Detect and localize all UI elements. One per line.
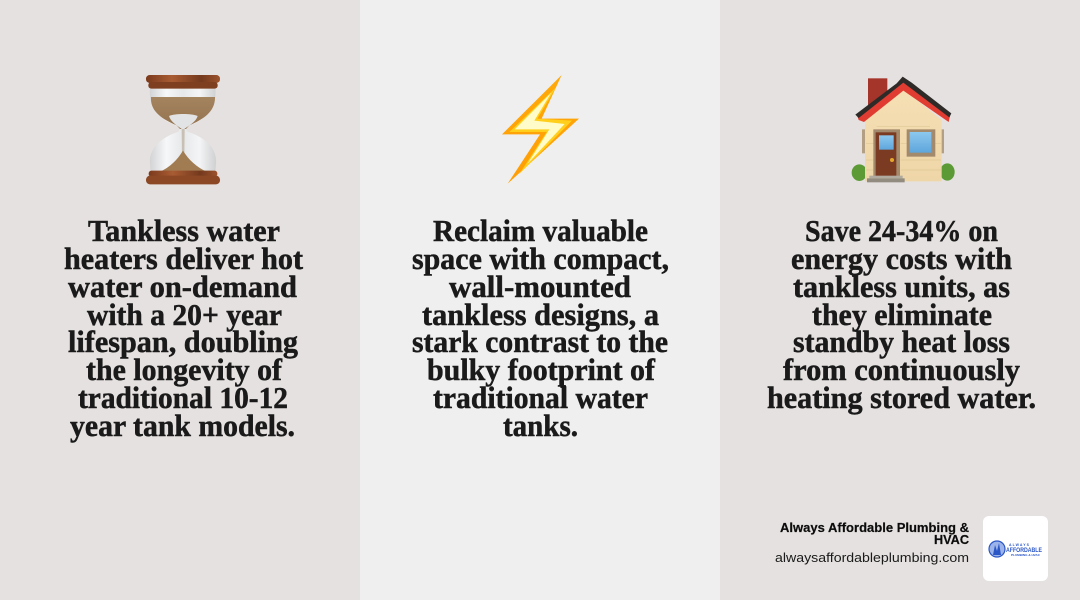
company name — [780, 520, 970, 547]
heading text: lifespan: heaters deliver hot — [64, 241, 304, 276]
company logo — [983, 516, 1048, 581]
panel: compact space — [360, 0, 720, 600]
heading text: compact space: space with compact, — [412, 241, 669, 276]
panel background: compact space — [360, 0, 720, 600]
panel background: energy savings — [720, 0, 1080, 600]
heading text: energy savings: standby heat loss — [793, 324, 1010, 359]
heading text: lifespan: lifespan, doubling — [68, 324, 298, 359]
heading text: lifespan: year tank models. — [70, 408, 295, 443]
panel: lifespan — [0, 0, 360, 600]
heading text: compact space: stark contrast to the — [412, 324, 668, 359]
website: alwaysaffordableplumbing.com — [775, 550, 969, 565]
icon: lightning bolt — [502, 75, 579, 184]
heading text: lifespan: the longevity of — [86, 352, 283, 387]
heading text: energy savings: energy costs with — [791, 241, 1012, 276]
heading text: lifespan: Tankless water — [88, 213, 280, 248]
panel: energy savings — [720, 0, 1080, 600]
company attribution — [775, 516, 1048, 581]
heading text: energy savings: Save 24-34% on — [805, 213, 998, 248]
company logo: ALWAYS — [1009, 543, 1030, 547]
company name: Always Affordable Plumbing & — [780, 520, 969, 535]
company name: HVAC — [934, 532, 970, 547]
heading text: compact space: tanks. — [503, 408, 578, 443]
heading text: energy savings: tankless units, as — [793, 269, 1010, 304]
heading text: compact space: Reclaim valuable — [433, 213, 648, 248]
heading text: energy savings: heating stored water. — [767, 380, 1036, 415]
icon: house — [852, 77, 955, 182]
heading text: compact space: tankless designs, a — [422, 297, 659, 332]
heading text: lifespan: water on-demand — [68, 269, 297, 304]
panel background: lifespan — [0, 0, 360, 600]
icon: hourglass — [146, 75, 220, 184]
heading text: lifespan: with a 20+ year — [87, 297, 282, 332]
heading text: energy savings: from continuously — [783, 352, 1020, 387]
heading text: energy savings: they eliminate — [812, 297, 992, 332]
heading text: lifespan — [64, 213, 304, 443]
heading text: compact space: bulky footprint of — [427, 352, 656, 387]
heading text: compact space: traditional water — [433, 380, 648, 415]
company logo: PLUMBING & HVAC — [1011, 553, 1041, 557]
heading text: lifespan: traditional 10-12 — [78, 380, 288, 415]
heading text: compact space — [412, 213, 669, 443]
heading text: energy savings — [767, 213, 1036, 415]
heading text: compact space: wall-mounted — [449, 269, 631, 304]
company logo: AFFORDABLE — [1006, 548, 1042, 554]
